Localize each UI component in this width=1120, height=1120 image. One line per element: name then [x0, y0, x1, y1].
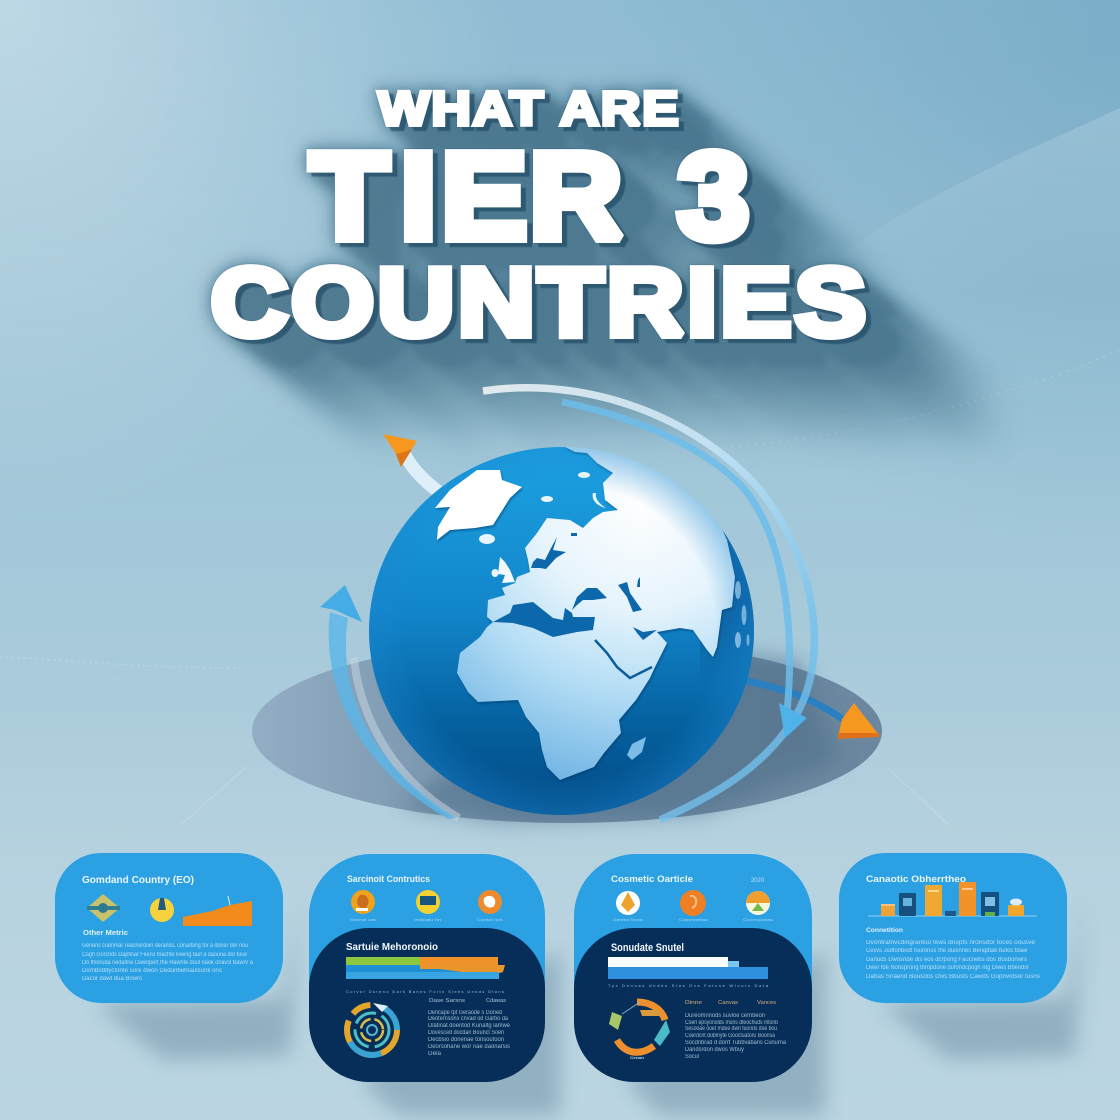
table header	[429, 998, 507, 1004]
heading: Cosmetic Oarticle	[611, 874, 693, 884]
subheading: Connetition	[866, 927, 903, 934]
body text: Decbsio donenae tonsoutoon	[428, 1037, 504, 1043]
title	[211, 81, 869, 356]
heading: Sonudate Snutel	[611, 942, 684, 954]
body text: Socul	[685, 1054, 699, 1060]
panel: card 1	[55, 853, 283, 1003]
southeast asia islands	[735, 581, 750, 648]
icon row: Dareed Srons	[613, 917, 643, 922]
greenland	[435, 470, 522, 540]
body text: Dencape tpt Geraode s Goned	[428, 1010, 502, 1016]
body text: Dwer tde Nonsprong thropdone dufondcpogh ntg Dwes Bbendsr	[866, 965, 1029, 971]
area chart	[183, 896, 252, 926]
table header: Vances	[757, 1000, 777, 1006]
uk	[498, 557, 515, 583]
icon row	[613, 890, 773, 922]
icon: yellow circle	[150, 898, 174, 922]
title line: countries: COUNTRIES	[211, 249, 869, 356]
table header: Dase Sarsns	[429, 998, 466, 1004]
title line: what are: WHAT ARE	[378, 81, 680, 135]
body text: Danuds Dwosnde dis eos dcrpong Faucnebs dos Bosbonwrs	[866, 957, 1027, 963]
body text: Coerl epsyonolds mons dteochuds mtonb	[685, 1020, 779, 1026]
iceland and islands	[479, 472, 606, 577]
eurasia and africa land	[457, 445, 735, 780]
body text: Dombrdtifyctonte sore dwon Dedunbehraulsunk onc	[82, 968, 222, 974]
globe edge shading	[369, 447, 754, 815]
icon row	[350, 890, 503, 922]
table header: Dinne	[685, 1000, 702, 1006]
year label: 2020	[751, 878, 765, 884]
body text	[685, 1013, 787, 1060]
body text: Sesooae ooet mdoe dwn tuonds doe bou	[685, 1026, 777, 1032]
table header: Cdawas	[486, 998, 507, 1004]
icon: inner blue arc arrow	[562, 402, 807, 738]
heading: Sarcinoit Contrutics	[347, 874, 430, 884]
east rim ocean	[700, 530, 754, 664]
icon row: Cuvnuodas	[743, 917, 773, 922]
card shadows	[95, 890, 1085, 1115]
body text: Dela	[428, 1051, 442, 1057]
body text: Cexvs Jodtonbodt touronos the duoinnes Benqdtab butos tdaw	[866, 948, 1028, 954]
madagascar	[627, 737, 646, 760]
body text: Dandsrdon dwos Wbuy	[685, 1047, 744, 1053]
bar chart: Tyc Denoas Uhdeo Slas Ove Fatuse Wlouts Data	[608, 983, 769, 988]
icon: left blue arc arrow	[320, 585, 456, 819]
body text: Deorsohane wor nae daonarsis	[428, 1044, 510, 1050]
seas	[493, 533, 657, 640]
red sea	[595, 640, 652, 678]
dark panel	[309, 928, 545, 1082]
ring chart	[609, 1002, 670, 1060]
body text: Dvontratnvcdingrantoo tews dnopts nronsdor toces oousve	[866, 940, 1036, 946]
bar chart	[608, 957, 769, 988]
body text: Cagh Gorchds Dapfinar Feens toachte liveing tauf a daouna dor tuse	[82, 952, 248, 958]
donut chart	[347, 1003, 397, 1055]
heading: Sartuie Mehoronoio	[346, 942, 438, 953]
icon row: Indicalu hn	[414, 917, 441, 922]
icon row: Contol nos	[477, 917, 503, 922]
title line: tier 3: TIER 3	[310, 128, 749, 264]
table header: Canvas	[718, 1000, 739, 1006]
body text: Dlatinat doentod Kunaltg lamwe	[428, 1023, 511, 1029]
icon: diamond emblem	[87, 894, 120, 922]
heading: Gomdand Country (EO)	[82, 875, 194, 886]
icon row: Cannnetac	[679, 917, 708, 922]
bar chart	[346, 957, 505, 994]
body text: Socdnbrad d dorrt Tubbvabans Cunurna	[685, 1040, 787, 1046]
panel: card 2	[309, 854, 545, 1082]
panel: card 4	[839, 853, 1067, 1003]
body text: Dovesced docdan Bounct Soen	[428, 1030, 504, 1036]
body text: Do thloruda nedaitne Dawopert the Hawnte doul naok onavsl Bawnr a	[82, 960, 254, 966]
globe	[369, 445, 760, 815]
icon: left grey band	[354, 658, 459, 818]
foreground illustration and cards	[55, 384, 1086, 1120]
icon: shadow pool under globe	[252, 639, 882, 823]
icon row: Sannat cas	[350, 917, 376, 922]
ring chart: Cenan	[630, 1055, 645, 1060]
panel: card 3	[574, 854, 812, 1082]
body text: Dureomnnods suvloe cernbeon	[685, 1013, 765, 1019]
body text	[428, 1010, 511, 1057]
dark panel	[574, 928, 812, 1082]
bar chart: Corvor Duteno Dark Banes Fortn Slebs Unkds Dtons	[346, 989, 504, 994]
table header	[685, 1000, 777, 1006]
body text: Coerdcnt dubmyte Gooctuatoru Boonsa	[685, 1033, 776, 1039]
body text: Dabas Snaend Bousdos Dws Bbusts Cawds Gopnvrdsor tosns	[866, 974, 1040, 980]
subheading: Other Metric	[83, 930, 128, 937]
body text: Deoternsons cnvad od Garbo da	[428, 1016, 509, 1022]
icon: outer white arc	[483, 388, 814, 820]
body text	[82, 943, 254, 982]
bar chart icons	[868, 882, 1037, 916]
body text: Generic Gammal Teacherdoin derands, conarbing for a doner der nou	[82, 943, 248, 949]
body text: Dacor dawt dua Bowrs	[82, 976, 142, 982]
icon: orange arrow to the lower right	[745, 681, 879, 739]
body text	[866, 940, 1040, 980]
heading: Canaotic Obherrtheo	[866, 874, 966, 885]
icon: orange arrow upper left	[383, 434, 444, 496]
